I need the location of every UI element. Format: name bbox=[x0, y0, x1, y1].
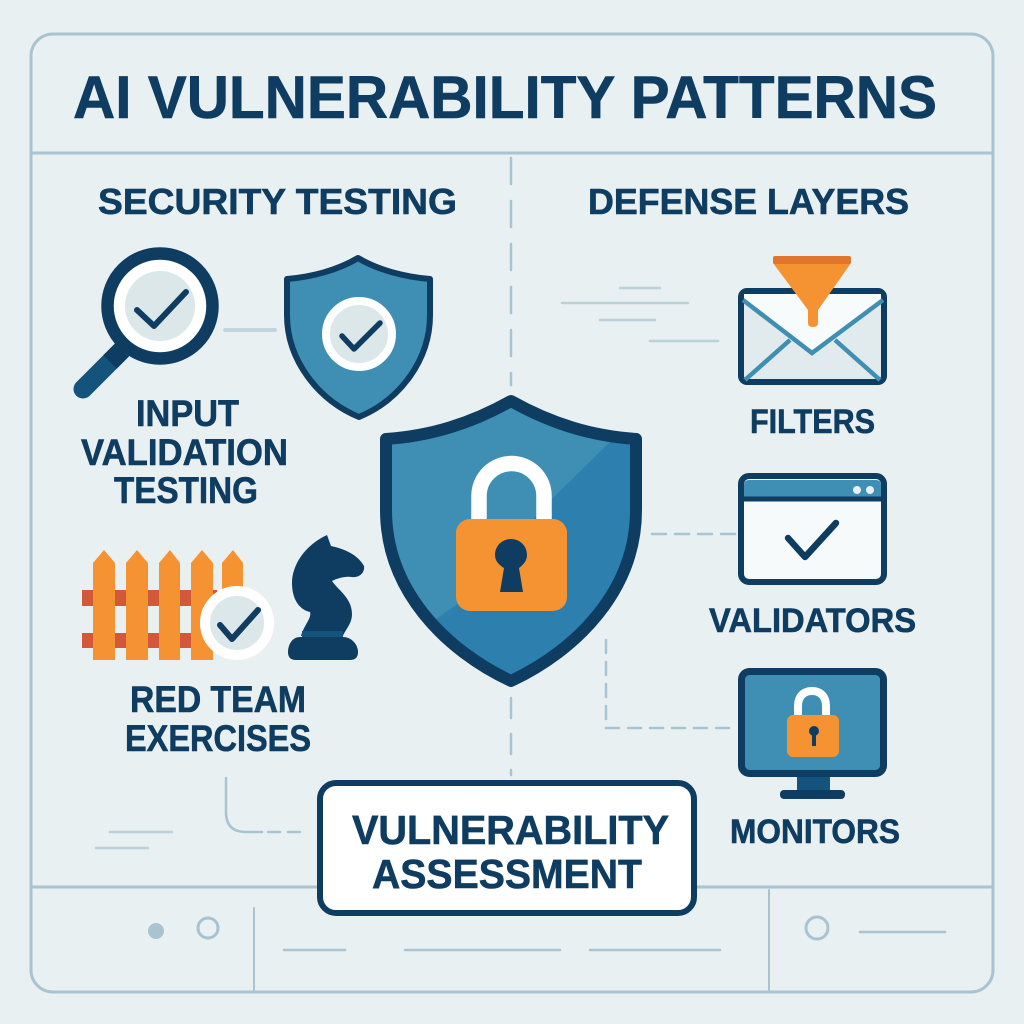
callout: vulnerability assessment: VULNERABILITY bbox=[352, 807, 669, 853]
label: filters: FILTERS bbox=[750, 403, 875, 441]
icon: magnifying glass bbox=[83, 254, 212, 389]
icon: fence with check bbox=[82, 550, 269, 660]
label: red team exercises bbox=[125, 679, 311, 759]
title: AI VULNERABILITY PATTERNS bbox=[73, 64, 937, 131]
icon: central shield with padlock bbox=[386, 401, 645, 690]
label: validators: VALIDATORS bbox=[709, 602, 916, 640]
label: input validation testing bbox=[81, 393, 288, 511]
label: monitors: MONITORS bbox=[730, 813, 900, 851]
heading: security testing: SECURITY TESTING bbox=[98, 181, 457, 222]
label: input validation testing: VALIDATION bbox=[81, 432, 288, 473]
icon: chess knight bbox=[288, 535, 364, 660]
icon: browser validator bbox=[741, 476, 884, 582]
icon: small shield bbox=[287, 258, 430, 417]
label: red team exercises: RED TEAM bbox=[130, 679, 306, 720]
icon: monitor with lock bbox=[742, 672, 884, 799]
label: input validation testing: INPUT bbox=[136, 393, 239, 434]
callout: vulnerability assessment: ASSESSMENT bbox=[372, 851, 642, 897]
icon: envelope with funnel bbox=[741, 256, 884, 382]
heading: defense layers: DEFENSE LAYERS bbox=[588, 181, 909, 222]
callout: vulnerability assessment bbox=[320, 783, 694, 913]
label: red team exercises: EXERCISES bbox=[125, 718, 311, 759]
label: input validation testing: TESTING bbox=[114, 470, 258, 511]
